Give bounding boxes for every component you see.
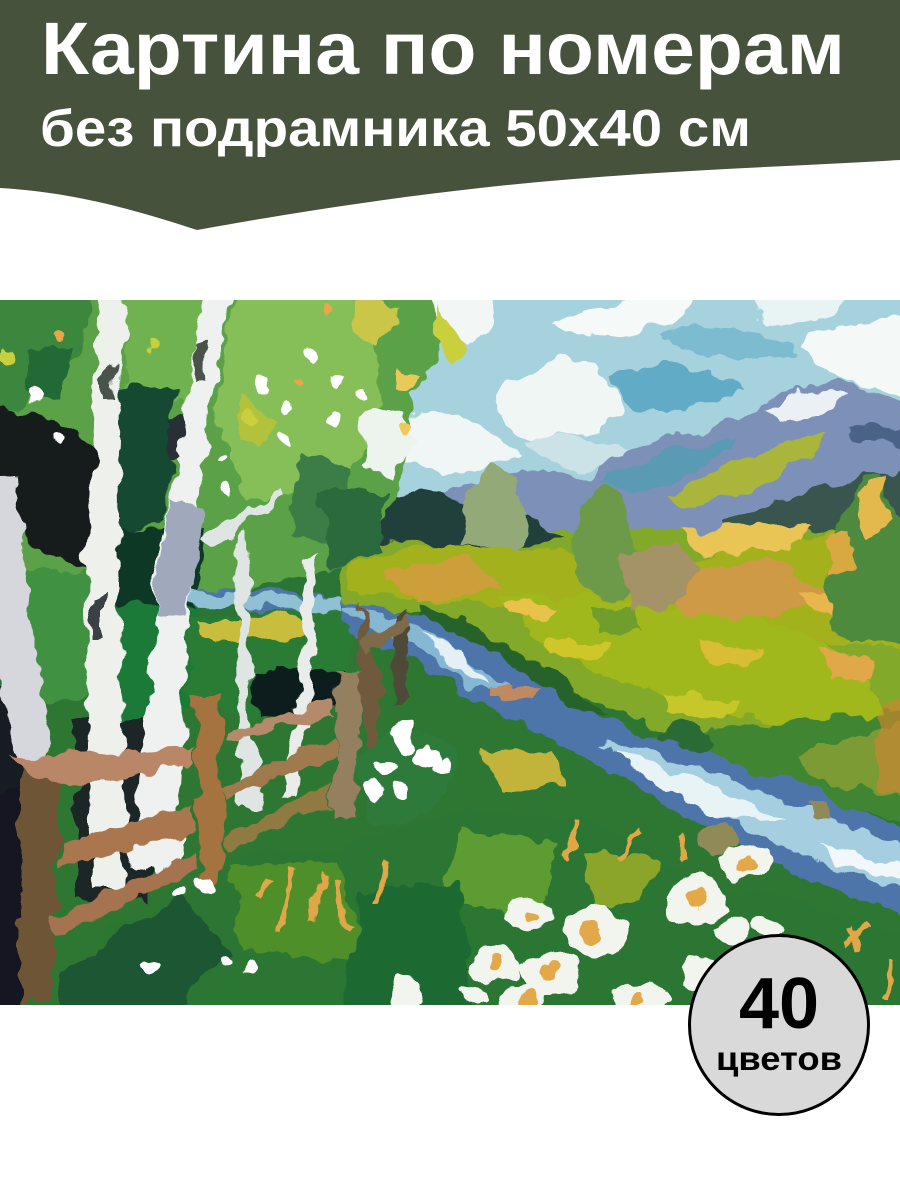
wooden fence: [10, 600, 410, 1000]
leaves: [3, 304, 411, 494]
sky: [396, 300, 900, 498]
distant trees: [380, 465, 900, 645]
badge: 40 цветов: [690, 936, 868, 1114]
daisies: [387, 844, 786, 1010]
badge number: 40: [739, 964, 819, 1044]
stream: [190, 585, 900, 922]
badge label: цветов: [716, 1040, 842, 1077]
meadow: [340, 522, 900, 733]
foreground grass: [58, 819, 894, 1005]
subtitle: без подрамника 50х40 см: [40, 100, 751, 158]
far riverbank and right bank: [338, 604, 900, 836]
tree canopy: [0, 280, 470, 1025]
birch trunks: [0, 285, 316, 890]
title: Картина по номерам: [41, 7, 845, 90]
header banner: [0, 0, 900, 230]
white wildflower bush: [355, 725, 560, 825]
mountains: [430, 380, 900, 550]
painting: spring meadow with birches and stream: [0, 280, 900, 1025]
